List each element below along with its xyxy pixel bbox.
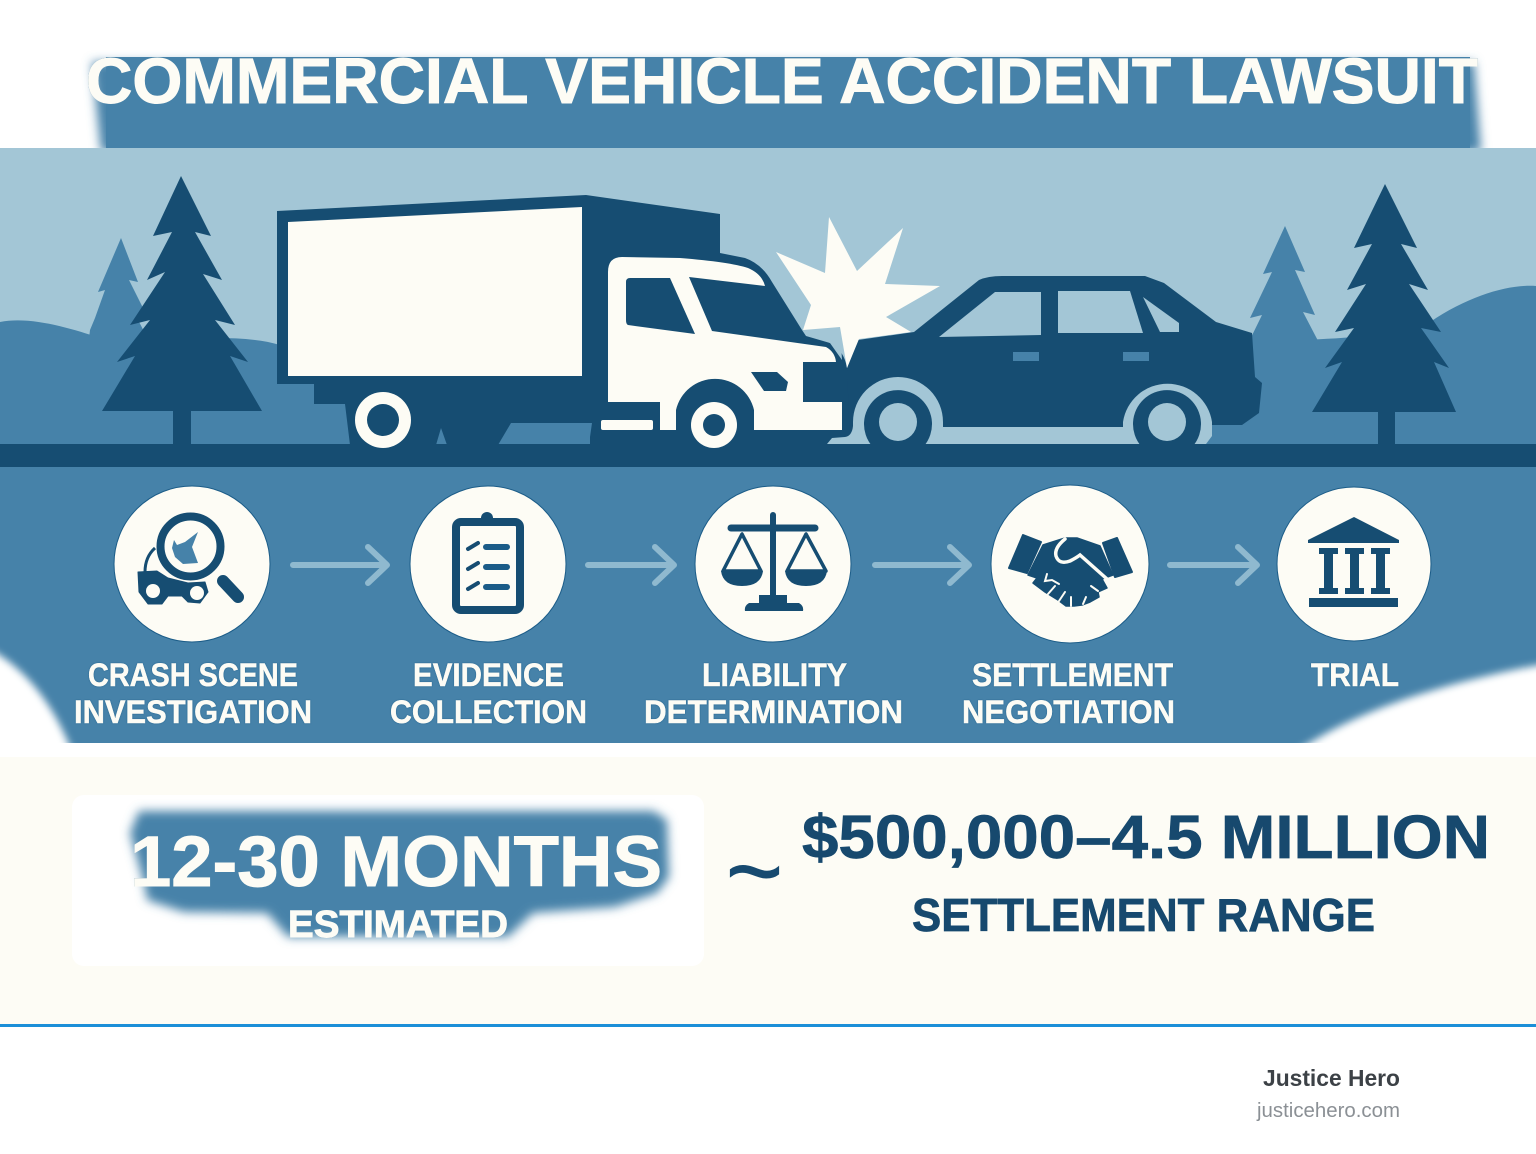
quarter window (1143, 297, 1179, 332)
rear window (1058, 291, 1143, 333)
truck front wheel (691, 402, 737, 448)
step 2: evidence collection (390, 486, 587, 730)
icon: clipboard checklist (456, 512, 520, 610)
icon: scales of justice (721, 515, 827, 611)
icon: handshake (1009, 535, 1132, 606)
truck dark silhouette (277, 195, 855, 445)
label 1: CRASH SCENE (88, 657, 298, 693)
road (0, 444, 1536, 467)
step 3: liability determination (644, 486, 903, 730)
panel corner fade left (0, 640, 75, 760)
duration caption: ESTIMATED (288, 904, 508, 946)
label 3: DETERMINATION (644, 694, 903, 730)
truck rear wheel (355, 392, 411, 448)
car body (847, 276, 1262, 445)
cargo box (288, 207, 582, 376)
title: COMMERCIAL VEHICLE ACCIDENT LAWSUIT (86, 45, 1478, 117)
front window (939, 292, 1041, 337)
duration value: 12-30 MONTHS (130, 823, 662, 902)
arrow 1 (293, 547, 387, 583)
label 2: COLLECTION (390, 694, 587, 730)
background tree left (80, 238, 165, 420)
label 2: EVIDENCE (413, 657, 564, 693)
label 3: LIABILITY (702, 657, 847, 693)
arrow 2 (588, 547, 674, 583)
circle 1 (114, 486, 270, 642)
title band (92, 62, 1481, 152)
label 4 (962, 657, 1175, 730)
car front wheel (827, 377, 943, 446)
settlement value: $500,000–4.5 MILLION (802, 803, 1490, 871)
arrow 3 (875, 547, 969, 583)
step (601, 420, 653, 430)
process panel (0, 467, 1536, 743)
label 5: TRIAL (1311, 657, 1399, 693)
label 4: NEGOTIATION (962, 694, 1175, 730)
label 2 (390, 657, 587, 730)
label 1 (74, 657, 312, 730)
footer rule (0, 1024, 1536, 1027)
step 1: crash scene investigation (74, 486, 312, 730)
truck (277, 195, 855, 445)
circle 3 (695, 486, 851, 642)
background tree right (1240, 226, 1335, 440)
side window (626, 278, 695, 334)
car (827, 276, 1262, 446)
title band core (106, 57, 1470, 148)
circle 4 (991, 485, 1149, 643)
step 5: trial (1277, 487, 1431, 693)
footer brand: Justice Hero (1263, 1065, 1400, 1091)
cab body (608, 257, 842, 430)
car underbody (930, 425, 1135, 445)
door handles (1013, 352, 1149, 361)
impact burst fragment (805, 327, 842, 360)
headlight (751, 372, 788, 391)
tilde approximately sign: ~ (726, 815, 783, 927)
footer url: justicehero.com (1256, 1099, 1400, 1122)
label 3 (644, 657, 903, 730)
step 4: settlement negotiation (962, 485, 1175, 730)
circle 5 (1277, 487, 1431, 641)
circle 2 (410, 486, 566, 642)
tree left (102, 176, 262, 445)
card (72, 795, 704, 966)
arrow 4 (1170, 547, 1257, 583)
impact burst (776, 217, 940, 368)
label 1: INVESTIGATION (74, 694, 312, 730)
car rear wheel (1123, 384, 1212, 446)
crash scene illustration (0, 148, 1536, 467)
label 4: SETTLEMENT (972, 657, 1173, 693)
tree right (1312, 184, 1456, 445)
background hills (0, 286, 1536, 446)
panel corner fade right (1285, 660, 1536, 760)
sky (0, 148, 1536, 446)
icon: courthouse (1308, 517, 1399, 607)
duration highlight blob (130, 811, 669, 937)
stats panel (0, 757, 1536, 1025)
icon: magnifier over car (138, 516, 238, 604)
white gap under panel (0, 743, 1536, 757)
settlement caption: SETTLEMENT RANGE (912, 889, 1375, 941)
timeline card (72, 795, 704, 966)
